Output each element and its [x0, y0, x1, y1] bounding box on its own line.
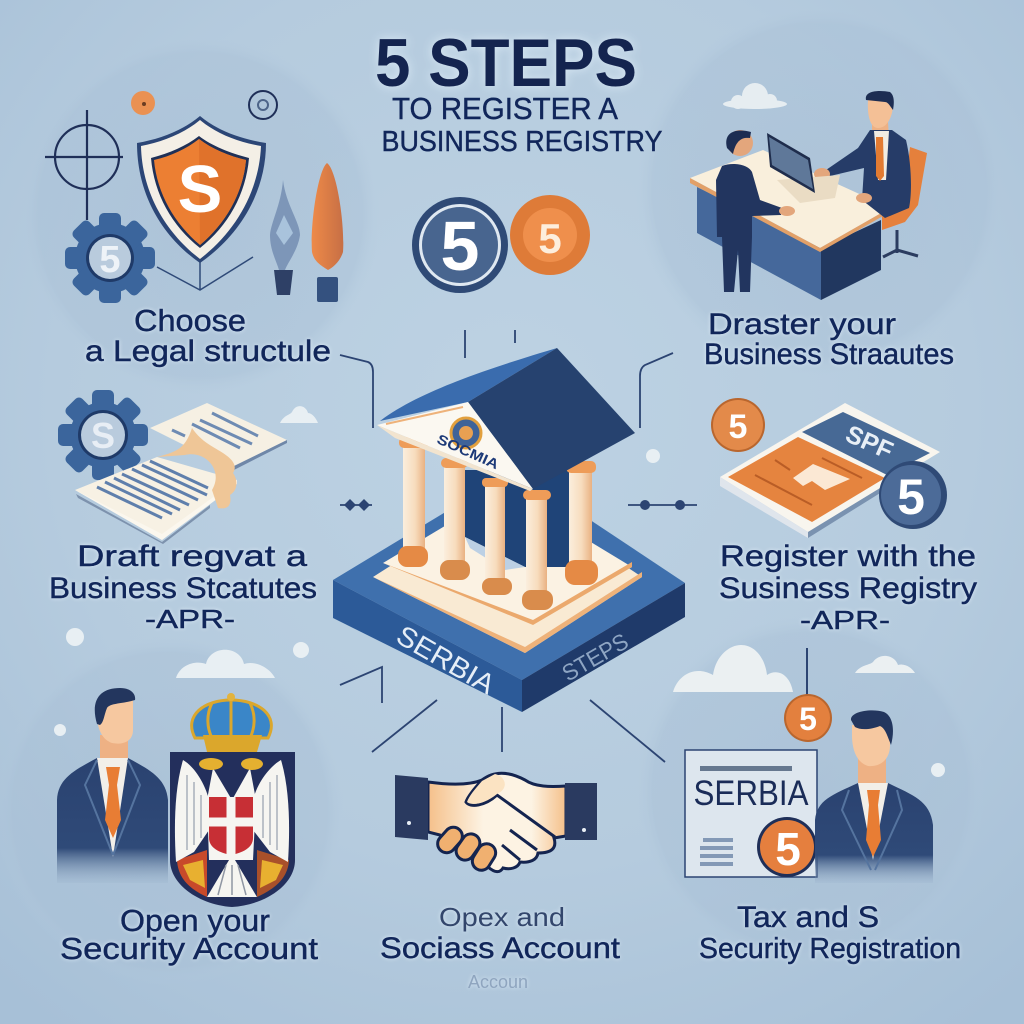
icon: small orange coin — [131, 91, 155, 115]
panel: tax and security registration — [673, 645, 961, 965]
icon: gear — [58, 390, 148, 480]
title: BUSINESS REGISTRY — [382, 126, 662, 158]
standing person — [716, 130, 795, 292]
dark back wall — [465, 470, 570, 567]
crown — [192, 700, 271, 738]
connector nodes — [344, 499, 685, 511]
chair — [882, 147, 927, 230]
icon: connector lines — [157, 257, 253, 290]
icon: documents: 5 — [897, 469, 925, 525]
icon: Serbian coat of arms — [170, 693, 295, 907]
title — [375, 25, 662, 158]
label: Tax and S — [737, 901, 879, 934]
steps — [373, 490, 642, 653]
icon: document with Serbia — [685, 750, 817, 877]
platform — [333, 470, 685, 680]
label: Opex and — [439, 902, 565, 932]
label: Susiness Registry — [719, 572, 977, 605]
icon: small coin — [784, 648, 832, 742]
label: Choose — [134, 303, 246, 338]
label — [49, 540, 317, 634]
label: Security Account — [60, 931, 318, 966]
columns — [398, 437, 598, 610]
title: 5 STEPS — [375, 25, 637, 101]
label: Sociass Account — [380, 932, 621, 965]
icon: clouds — [673, 645, 915, 692]
icon: crosshair — [45, 110, 123, 220]
connector lines — [340, 330, 697, 762]
icon: orange feather lamp — [312, 163, 343, 302]
icon: shield: S — [178, 152, 222, 227]
icon: gear with 5: 5 — [99, 239, 121, 281]
icon: cloud — [723, 83, 787, 109]
panel: handshake — [380, 773, 621, 992]
label — [380, 902, 621, 992]
label: -APR- — [800, 605, 890, 635]
central building: Serbia — [333, 348, 685, 712]
icon: gear with 5 — [65, 213, 155, 303]
label: a Legal structule — [85, 335, 331, 368]
label — [719, 540, 977, 635]
number badges centre: 5 — [538, 215, 562, 262]
wings — [175, 760, 209, 862]
label — [704, 308, 954, 371]
label — [85, 303, 331, 368]
shield — [170, 752, 295, 907]
number badges centre — [412, 195, 590, 293]
label: Accoun — [468, 972, 528, 992]
icon: businessman — [815, 710, 933, 883]
icon: small coin: 5 — [799, 701, 817, 737]
panel: choose a legal structure — [45, 91, 343, 368]
label: Draster your — [708, 308, 896, 341]
icon: handshake — [395, 773, 597, 874]
title: TO REGISTER A — [392, 91, 618, 126]
panel: draft business statutes — [49, 390, 317, 634]
icon: orange coin: 5 — [729, 408, 747, 446]
desk — [697, 187, 821, 300]
label: Open your — [120, 903, 270, 938]
label — [699, 901, 961, 965]
panel: drafter your business statutes — [690, 83, 954, 371]
icon: businessman — [57, 688, 168, 883]
label: Business Straautes — [704, 338, 954, 371]
seated person — [814, 91, 911, 218]
icon: orange coin — [711, 398, 765, 452]
central building: Serbia: SOCMIA — [435, 431, 501, 472]
panel: open your security account — [57, 688, 318, 966]
icon: shield — [137, 116, 266, 263]
label — [60, 903, 318, 966]
breast shield — [209, 797, 253, 855]
icon: documents — [720, 403, 947, 538]
icon: gear: S — [91, 415, 115, 456]
icon: document with Serbia: 5 — [775, 823, 801, 875]
icon: document with Serbia: SERBIA — [694, 774, 809, 813]
number badges centre: 5 — [441, 207, 479, 285]
icon: desk with two people — [690, 91, 927, 300]
icon: front document with seal — [75, 428, 237, 544]
decorative clouds — [54, 406, 945, 777]
panel: register with the business registry — [711, 398, 977, 635]
roof — [380, 348, 557, 421]
label: Draft regvat a — [77, 540, 307, 573]
label: Business Stcatutes — [49, 572, 317, 605]
icon: blue pen tool — [270, 180, 300, 295]
icon: documents: SPF — [841, 420, 897, 465]
tail — [207, 855, 257, 897]
icon: back document — [150, 403, 287, 472]
label: Register with the — [720, 540, 976, 573]
label: platform text: SERBIA — [391, 619, 501, 700]
central building: Serbia: STEPS — [557, 628, 633, 686]
label: -APR- — [145, 604, 235, 634]
laptop monitor — [777, 175, 840, 203]
icon: small outline coin — [249, 91, 277, 119]
title: 5 STEPS — [375, 25, 637, 101]
lower red and gold — [177, 850, 207, 897]
necks — [207, 768, 256, 860]
label: Security Registration — [699, 933, 961, 965]
